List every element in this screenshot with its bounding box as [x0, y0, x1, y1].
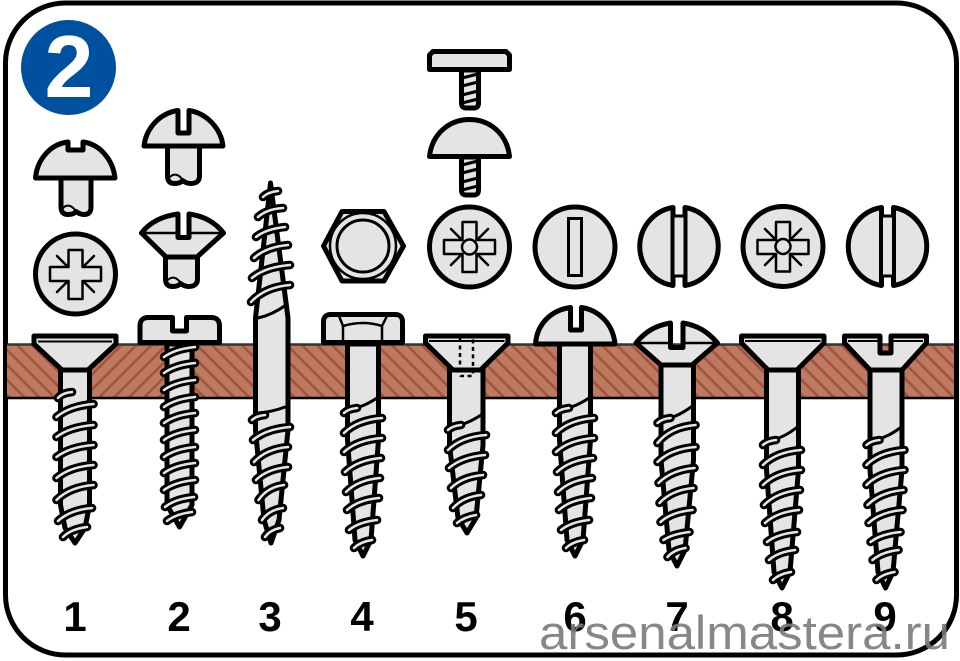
- screw number labels: 7: [665, 593, 689, 640]
- watermark text: arsenalmastera.ru: [539, 606, 950, 659]
- screw 1: [34, 336, 116, 543]
- icon: screw 1 cross recess top view: [36, 234, 116, 314]
- badge: number 2: [21, 17, 116, 116]
- screw number labels: 4: [350, 593, 374, 640]
- icon: screw 5 cross recess top view: [430, 207, 510, 287]
- icon: screw 5 dome cap side view: [430, 120, 510, 195]
- screw number labels: 9: [873, 593, 897, 640]
- icon: screw 2 side view of oval countersunk head: [142, 214, 224, 286]
- screw number labels: 2: [167, 593, 191, 640]
- icon: screw 9 split slot top view: [848, 208, 927, 286]
- screw 2: [140, 318, 220, 527]
- screw 7: [636, 323, 718, 566]
- icon: screw 4 hexagon head top view: [324, 212, 404, 281]
- screw 5: [426, 336, 508, 533]
- screw 3: [251, 183, 290, 543]
- screw number labels: 3: [258, 593, 282, 640]
- screw 9: [844, 336, 926, 588]
- icon: screw 6 slot top view: [535, 207, 615, 287]
- screw number labels: 1: [63, 593, 87, 640]
- screw 4: [324, 314, 402, 556]
- icon: screw 8 cross recess top view: [743, 206, 823, 286]
- badge: number 2: 2: [45, 17, 93, 116]
- icon: screw 2 side view of round head: [144, 110, 223, 184]
- screw number labels: 8: [770, 593, 794, 640]
- screw number labels: 5: [454, 593, 478, 640]
- screw number labels: [63, 593, 897, 640]
- icon: screw 7 split slot top view: [640, 208, 718, 286]
- icon: screw 1 side view of round head: [36, 142, 115, 214]
- icon: screw 5 flat cap side view: [430, 52, 510, 108]
- screw 8: [742, 336, 824, 588]
- wood board: [7, 344, 954, 398]
- screw number labels: 6: [563, 593, 587, 640]
- screw 6: [536, 308, 615, 556]
